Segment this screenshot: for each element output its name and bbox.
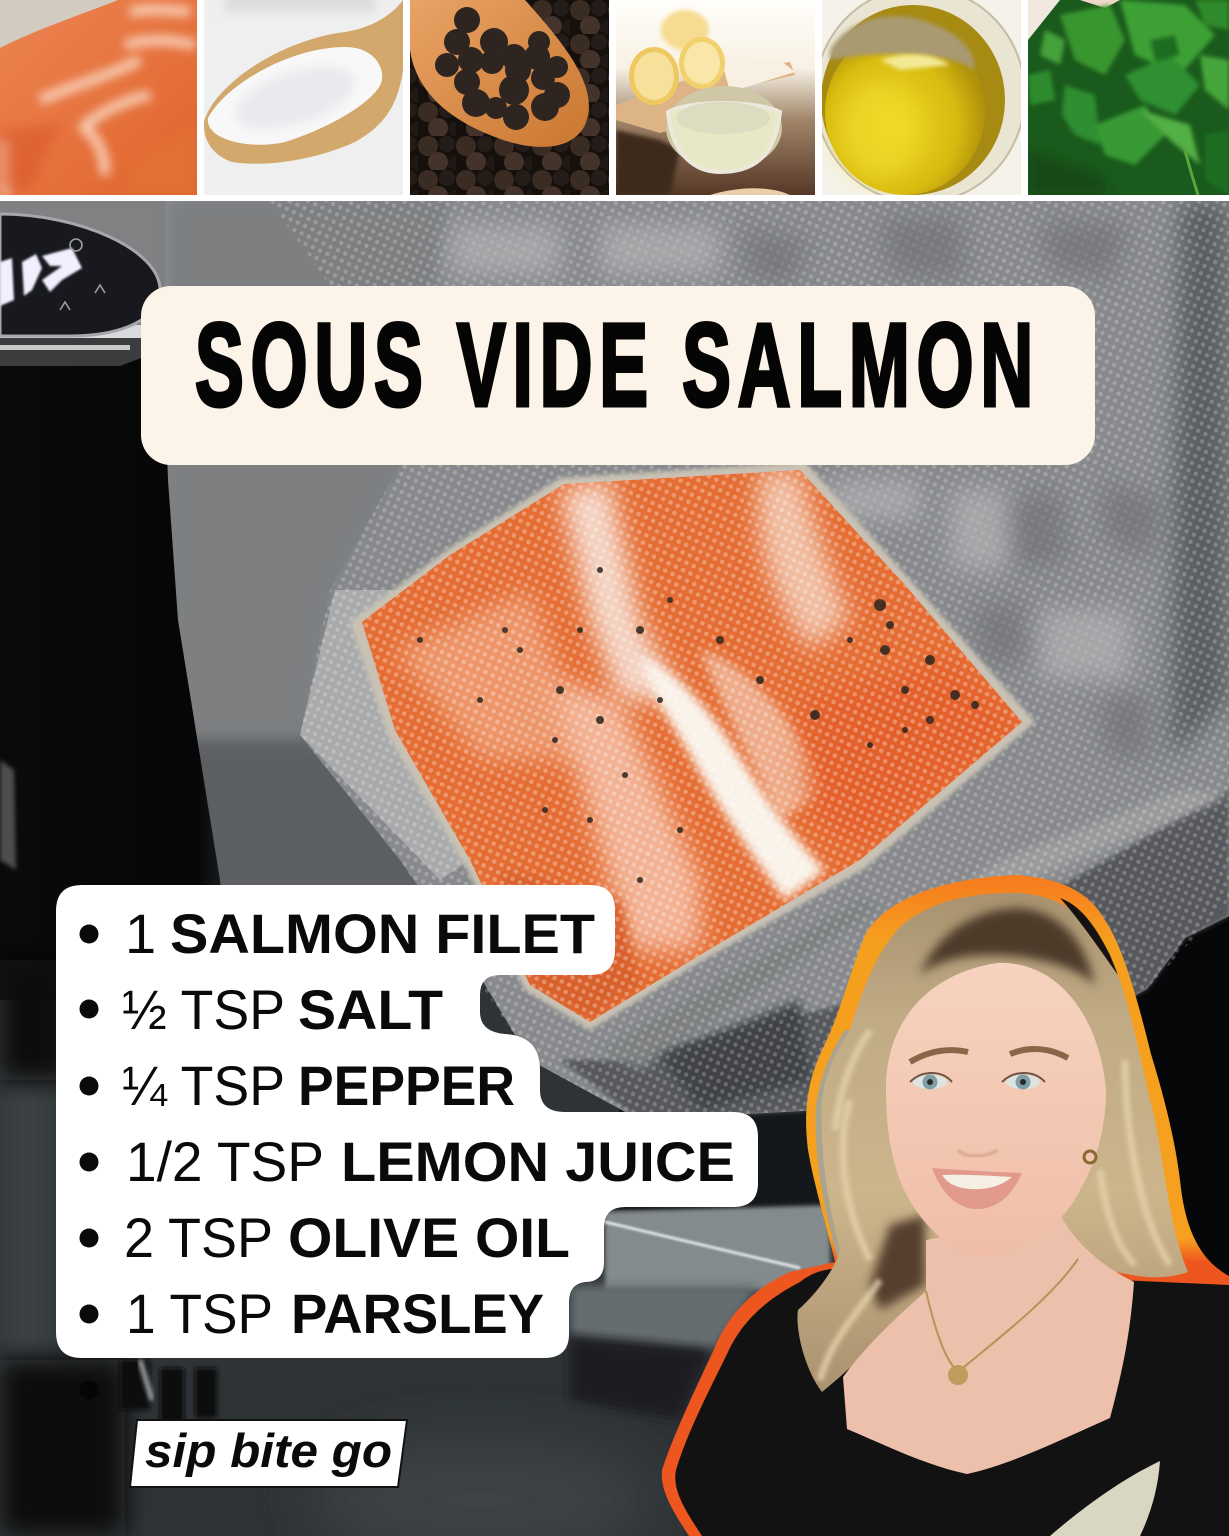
face <box>886 963 1106 1256</box>
ingredient: pepper <box>80 1054 515 1117</box>
hair <box>797 893 1188 1392</box>
ingredient: olive oil <box>80 1206 570 1269</box>
portrait: smiling woman with orange outline <box>662 875 1229 1536</box>
photo: raw salmon <box>0 0 197 195</box>
neck and chest <box>843 1215 1134 1474</box>
earring <box>1084 1151 1096 1163</box>
knife blade <box>1050 1461 1160 1536</box>
ingredient: parsley: PARSLEY <box>291 1282 544 1345</box>
ingredient: salt <box>80 978 443 1041</box>
salmon fillet <box>340 460 1050 1030</box>
ingredient: olive oil: OLIVE OIL <box>288 1206 570 1269</box>
title text: SOUS VIDE SALMON <box>195 299 1033 431</box>
hair roots and shading <box>820 908 1170 1380</box>
ingredient: lemon juice: LEMON JUICE <box>341 1130 735 1193</box>
ingredient: pepper: ¼ TSP <box>122 1054 285 1117</box>
photo: salt in wooden spoon <box>204 0 403 195</box>
nose <box>958 1150 998 1156</box>
ingredient: pepper: PEPPER <box>298 1054 515 1117</box>
ingredient: lemon juice <box>80 1130 735 1193</box>
beige fringe beside hair <box>816 1030 860 1260</box>
eyes and brows <box>910 1049 1068 1090</box>
vacuum bag <box>165 201 1229 1120</box>
smile <box>932 1168 1022 1209</box>
photo: lemon and juice <box>616 0 815 195</box>
photo: peppercorns in wooden spoon <box>410 0 609 195</box>
ingredient: salt: ½ TSP <box>122 978 285 1041</box>
necklace <box>926 1259 1078 1385</box>
ingredient: lemon juice: 1/2 TSP <box>126 1130 324 1193</box>
stray empty bullet <box>80 1380 98 1400</box>
ingredient: salt: SALT <box>298 978 443 1041</box>
title banner <box>141 286 1095 465</box>
black top <box>675 1268 1229 1536</box>
orange cutout outline <box>662 875 1229 1536</box>
logo: sip bite go: sip bite go <box>145 1424 392 1477</box>
ingredient: parsley: 1 TSP <box>126 1282 273 1345</box>
photo: olive oil <box>815 0 1025 203</box>
ingredient list panel <box>56 885 758 1358</box>
logo: sip bite go <box>130 1420 407 1487</box>
ingredient: salmon filet: 1 <box>125 902 156 965</box>
ingredient photo strip <box>0 0 1229 203</box>
photo: parsley <box>1028 0 1229 195</box>
ingredient: olive oil: 2 TSP <box>124 1206 273 1269</box>
ingredient: parsley <box>80 1282 544 1345</box>
ingredient: salmon filet: SALMON FILET <box>170 902 595 965</box>
immersion circulator <box>0 214 232 1428</box>
water background <box>0 982 835 1536</box>
temperature display digits <box>0 248 82 306</box>
